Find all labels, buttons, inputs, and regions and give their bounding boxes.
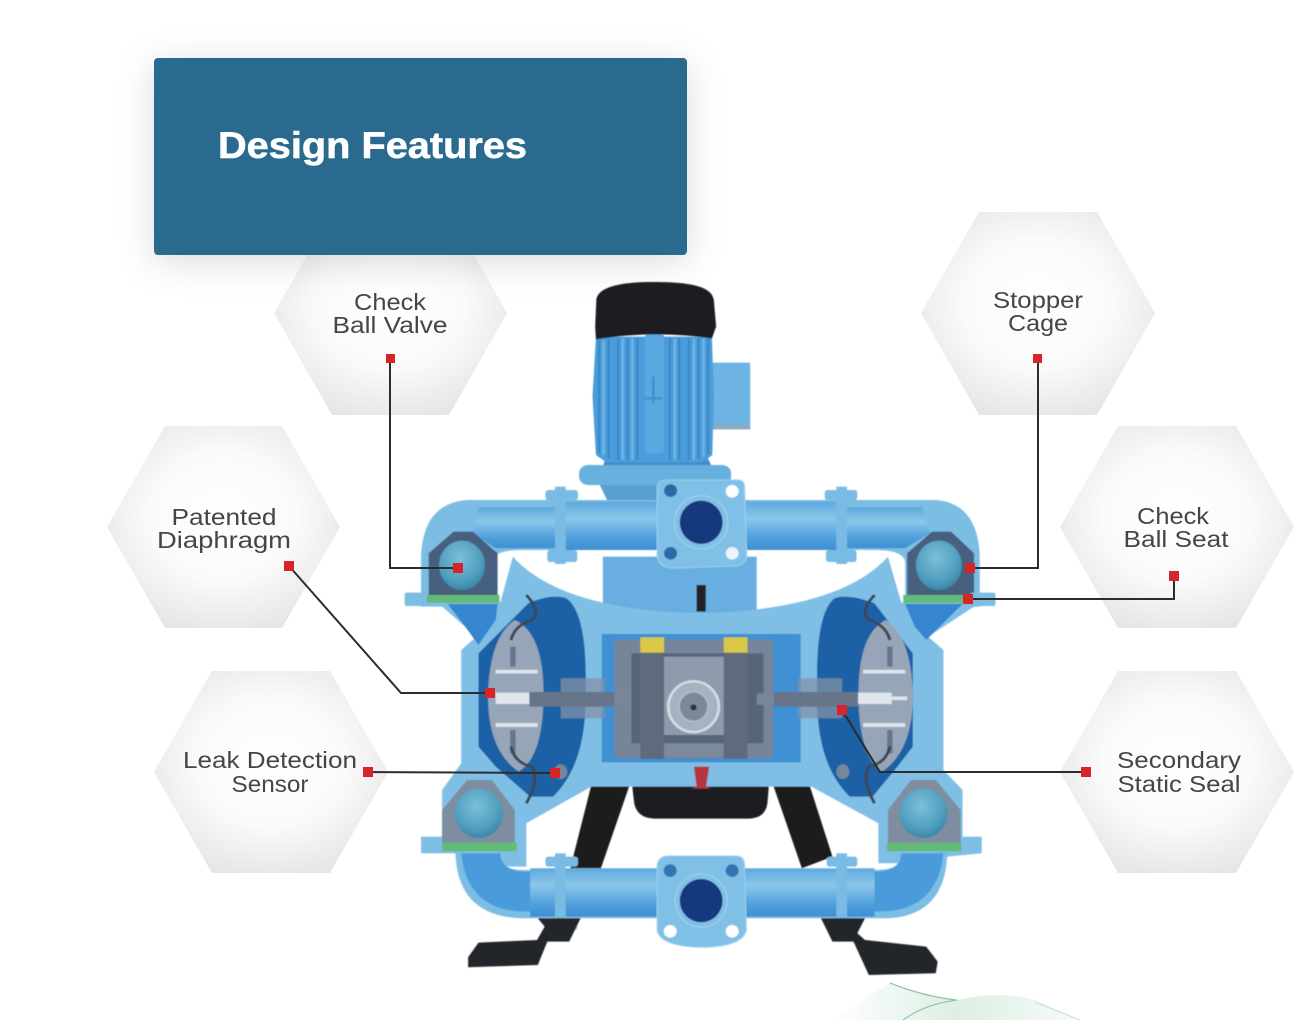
hexagon: Stopper Cage: Stopper <box>993 287 1083 313</box>
callout: Check Ball Valve <box>386 354 463 573</box>
lower right check ball <box>887 780 961 851</box>
junction box <box>705 363 750 429</box>
pump illustration <box>405 282 995 975</box>
main body casting <box>421 557 982 867</box>
hexagon: Check Ball Valve <box>274 212 507 415</box>
red drain plug <box>691 767 711 789</box>
callout: Stopper Cage <box>965 354 1042 573</box>
heading: Design Features <box>218 125 527 166</box>
outer manifold casing <box>421 500 980 607</box>
title card <box>154 58 687 255</box>
right pipe flange <box>825 487 857 564</box>
hexagon: Stopper Cage <box>921 212 1155 415</box>
feet <box>468 918 938 975</box>
hexagon: Secondary Static Seal: Secondary <box>1117 747 1242 773</box>
upper left ball seat and mounting flange <box>405 593 500 606</box>
decorative green wave <box>832 983 1080 1020</box>
hexagon: Secondary Static Seal: Static Seal <box>1118 771 1240 797</box>
right check ball housing <box>907 532 974 603</box>
hexagon: Check Ball Seat: Ball Seat <box>1124 526 1229 552</box>
hexagon: Secondary Static Seal <box>1060 671 1294 873</box>
lower left check ball <box>442 780 517 851</box>
suction pipe <box>461 853 943 912</box>
motor fan cover <box>595 282 716 339</box>
right shaft <box>757 678 892 718</box>
hexagon: Check Ball Seat <box>1060 426 1294 628</box>
upper right ball seat and mounting flange <box>903 593 995 606</box>
eccentric cam <box>668 681 719 732</box>
gearbox below manifold <box>603 557 757 613</box>
oil pan <box>632 780 769 819</box>
left diaphragm chamber <box>478 597 586 797</box>
left discharge port channel <box>448 604 498 645</box>
right diaphragm plate <box>858 595 913 803</box>
callout: Check Ball Seat <box>963 571 1179 604</box>
motor base flange <box>579 455 731 503</box>
hexagon: Stopper Cage: Cage <box>1008 310 1068 336</box>
hexagon: Check Ball Valve: Check <box>354 289 427 315</box>
lower right pipe flange <box>827 853 857 932</box>
motor body with fins <box>592 333 714 463</box>
leak sensor plugs <box>554 764 849 779</box>
hexagon: Leak Detection Sensor: Leak Detection <box>183 747 357 773</box>
hexagon: Patented Diaphragm: Diaphragm <box>157 527 291 553</box>
hexagon: Patented Diaphragm: Patented <box>172 504 276 530</box>
hexagon: Leak Detection Sensor: Sensor <box>232 771 309 797</box>
callout: Secondary Static Seal <box>837 705 1091 777</box>
suction flange <box>657 856 746 947</box>
left check ball housing <box>429 532 498 603</box>
hexagon: Patented Diaphragm <box>107 426 340 628</box>
right discharge port channel <box>905 604 963 640</box>
manifold inner pipe <box>473 507 930 548</box>
support legs <box>570 785 832 868</box>
drive rods with yellow caps <box>640 637 747 759</box>
right diaphragm chamber <box>817 597 913 797</box>
discharge flange <box>657 480 747 568</box>
left shaft <box>496 678 632 718</box>
callout: Patented Diaphragm <box>284 561 495 698</box>
hexagon: Check Ball Valve: Ball Valve <box>332 312 448 338</box>
central casing <box>602 634 801 762</box>
lower left pipe flange <box>545 853 578 932</box>
suction manifold casing <box>455 853 947 918</box>
pump lower section: chambers, drive and suction manifold <box>405 557 995 975</box>
hexagon: Leak Detection Sensor <box>154 671 388 873</box>
left pipe flange <box>545 487 578 564</box>
left diaphragm plate <box>488 595 544 803</box>
callout: Leak Detection Sensor <box>363 767 560 778</box>
hexagon: Check Ball Seat: Check <box>1137 503 1210 529</box>
pump upper section: motor and discharge manifold <box>421 282 980 613</box>
